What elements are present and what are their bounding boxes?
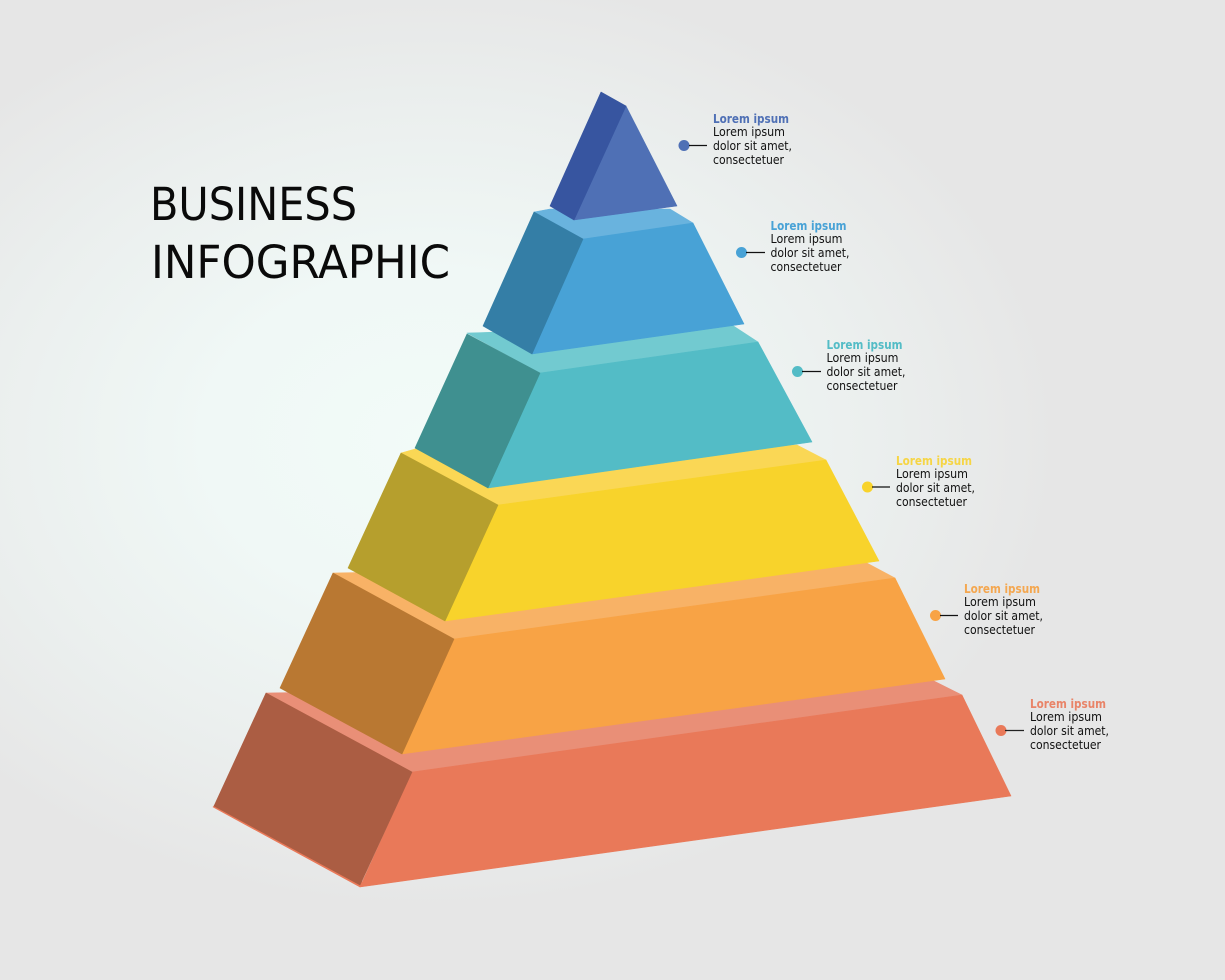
tier 4: yellow: [348, 445, 879, 621]
callout 6: consectetuer: [1030, 737, 1102, 752]
callout 4: dolor sit amet,: [896, 480, 975, 495]
callout 2: Lorem ipsum: [770, 231, 842, 246]
callout 5: dolor sit amet,: [964, 608, 1043, 623]
pyramid: [213, 92, 1011, 887]
title: INFOGRAPHIC: [151, 236, 450, 289]
callout 2: [736, 218, 850, 274]
callout 6: dolor sit amet,: [1030, 723, 1109, 738]
title: [150, 178, 450, 289]
tier 3: teal: [415, 325, 812, 488]
callout 5: [930, 581, 1043, 637]
callout 5: Lorem ipsum: [964, 594, 1036, 609]
tier 2: blue: [483, 209, 744, 354]
callout 5: consectetuer: [964, 622, 1036, 637]
callout 3: [792, 337, 906, 393]
callout 5: Lorem ipsum: [964, 581, 1040, 596]
callout 3: consectetuer: [826, 378, 898, 393]
callout 2: dolor sit amet,: [770, 245, 850, 260]
callout 1: Lorem ipsum: [713, 111, 789, 126]
callout 1: consectetuer: [713, 152, 785, 167]
title: BUSINESS: [150, 178, 357, 231]
callout 4: consectetuer: [896, 494, 968, 509]
callout 4: Lorem ipsum: [896, 466, 968, 481]
callout 3: dolor sit amet,: [826, 364, 906, 379]
callout 1: [678, 111, 792, 167]
callout 3: Lorem ipsum: [826, 350, 898, 365]
tier 1: indigo top: [550, 92, 677, 220]
callout 6: Lorem ipsum: [1030, 696, 1106, 711]
callout 2: Lorem ipsum: [770, 218, 846, 233]
callout 6: Lorem ipsum: [1030, 709, 1102, 724]
callout 4: [862, 453, 975, 509]
callout 3: Lorem ipsum: [826, 337, 902, 352]
callout 4: Lorem ipsum: [896, 453, 972, 468]
callout 1: Lorem ipsum: [713, 124, 785, 139]
callout 1: dolor sit amet,: [713, 138, 792, 153]
tier 5: orange: [280, 562, 945, 754]
callout 2: consectetuer: [770, 259, 842, 274]
tier 6: coral base: [213, 680, 1011, 887]
callout 6: [996, 696, 1109, 752]
